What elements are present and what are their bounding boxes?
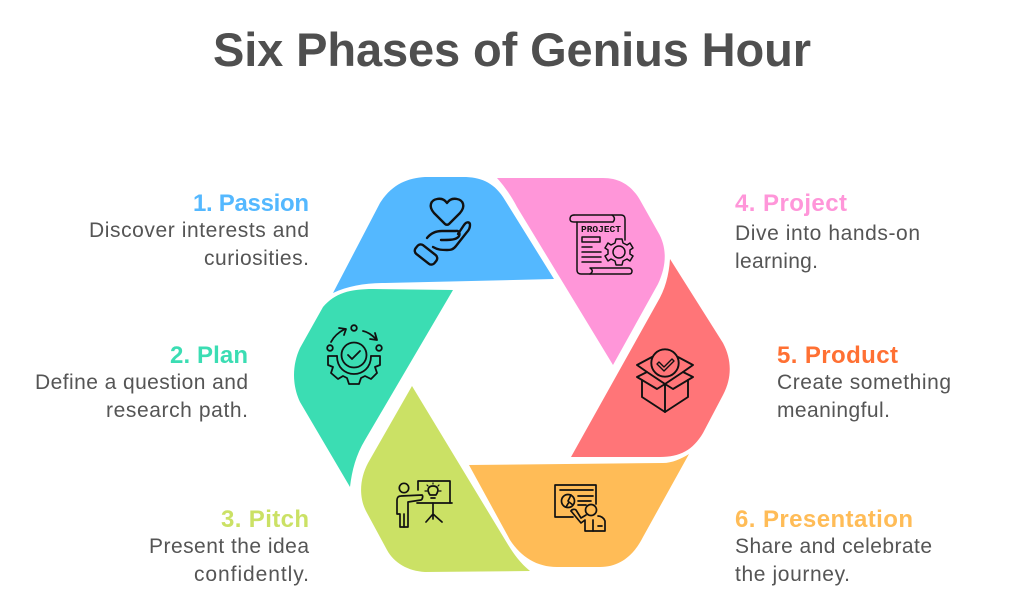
text: project: 4. Project xyxy=(735,190,847,217)
segment: product xyxy=(571,259,730,457)
text: plan: research path. xyxy=(106,399,248,422)
text: passion: 1. Passion xyxy=(193,190,309,217)
text: pitch: confidently. xyxy=(194,563,309,586)
text: pitch: Present the idea xyxy=(149,535,309,558)
segment: project xyxy=(497,178,665,365)
text: passion xyxy=(89,190,309,270)
icon: project scroll with gear xyxy=(570,215,633,274)
icon: teacher at screen xyxy=(555,485,605,531)
icon: gear with check xyxy=(327,325,382,384)
icon: box with check xyxy=(637,349,693,412)
title: Six Phases of Genius Hour xyxy=(213,23,811,76)
text: pitch xyxy=(149,506,309,586)
text: project xyxy=(735,190,920,273)
text: presentation: 6. Presentation xyxy=(735,506,913,533)
text: pitch: 3. Pitch xyxy=(221,506,309,533)
segment: plan xyxy=(294,289,453,487)
segment: presentation xyxy=(469,454,689,567)
segment: pitch xyxy=(361,386,530,572)
label: project: PROJECT xyxy=(581,224,621,235)
text: passion: Discover interests and xyxy=(89,219,309,242)
text: product: 5. Product xyxy=(777,342,898,369)
icon: presenter at board xyxy=(397,481,452,527)
text: passion: curiosities. xyxy=(204,247,309,270)
text: plan: Define a question and xyxy=(35,371,248,394)
text: presentation: Share and celebrate xyxy=(735,535,932,558)
text: plan: 2. Plan xyxy=(170,342,248,369)
text: product: Create something xyxy=(777,371,951,394)
text: plan xyxy=(35,342,248,422)
text: project: Dive into hands-on xyxy=(735,222,920,245)
text: presentation: the journey. xyxy=(735,563,850,586)
segment: passion xyxy=(333,177,554,293)
text: project: learning. xyxy=(735,250,818,273)
text: product: meaningful. xyxy=(777,399,890,422)
icon: heart in hand xyxy=(413,199,470,266)
text: presentation xyxy=(735,506,932,586)
text: product xyxy=(777,342,951,422)
